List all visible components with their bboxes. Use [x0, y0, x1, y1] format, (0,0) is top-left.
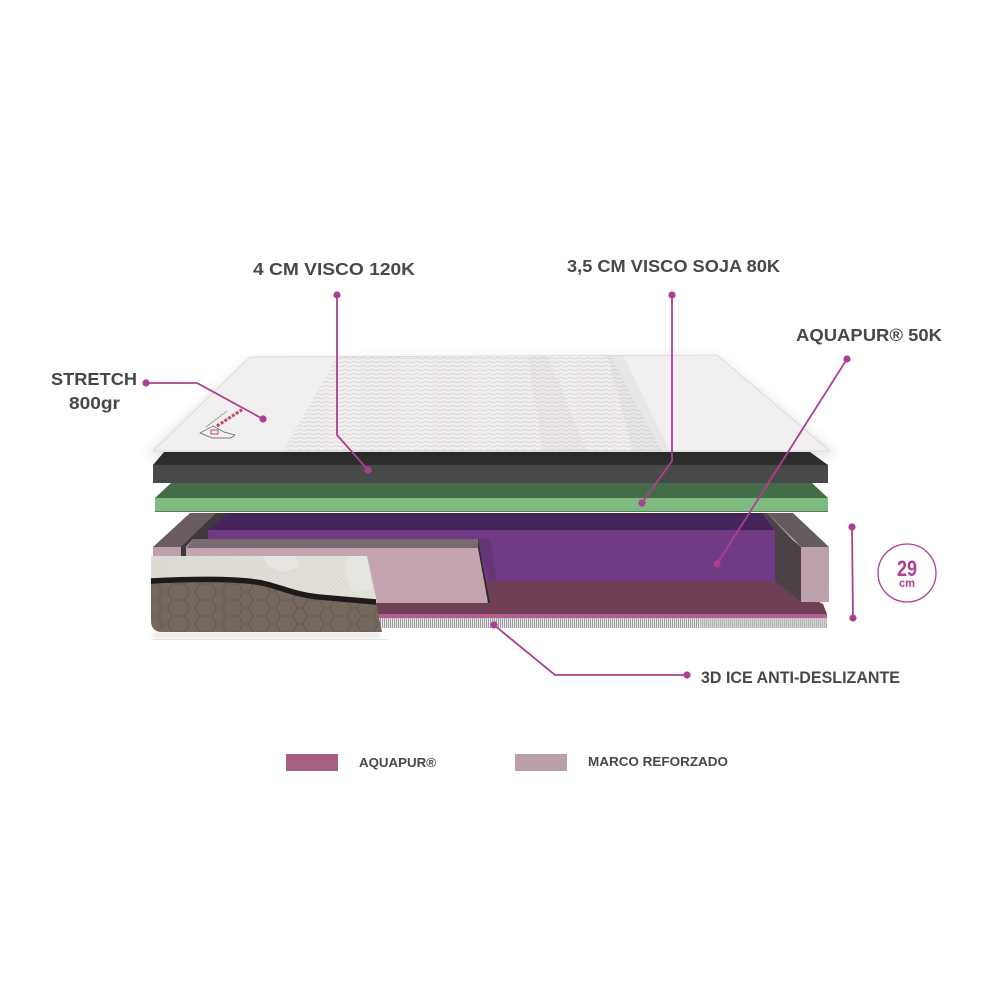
height dimension: 29 cm: cm: [899, 576, 915, 590]
legend item: marco reforzado: MARCO REFORZADO: [588, 754, 728, 769]
height dimension: 29 cm: [848, 523, 936, 622]
callout: stretch 800gr: 800gr: [69, 393, 120, 413]
height dimension: 29 cm: 29: [897, 556, 917, 581]
layer: green visco soja: [155, 483, 828, 512]
layer: reinforced frame left: [153, 513, 228, 559]
legend item: Aquapur: [286, 754, 436, 771]
mattress layers: [145, 355, 838, 628]
callout: 4 cm visco 120K: [253, 259, 415, 474]
callout: 3D ice anti-deslizante: 3D ICE ANTI-DESLIZANTE: [701, 669, 900, 687]
sample: black wave band: [151, 579, 376, 602]
layer: Aquapur floor: [375, 581, 827, 618]
layer: 3D ice anti-slip base: [380, 618, 827, 628]
legend item: marco reforzado: [515, 754, 728, 771]
callout: stretch 800gr: STRETCH: [51, 369, 137, 389]
layer: reinforced frame right: [763, 513, 829, 602]
legend item: Aquapur: AQUAPUR®: [359, 755, 436, 770]
callout: 3D ice anti-deslizante: [490, 621, 900, 687]
callout: 3,5 cm visco soja 80K: 3,5 CM VISCO SOJA 80K: [567, 256, 780, 276]
layer: dark visco: [153, 452, 828, 483]
layer: Aquapur purple core: [208, 513, 775, 581]
layer: reinforced frame front: [186, 539, 490, 603]
callout: Aquapur 50K: AQUAPUR® 50K: [796, 325, 942, 345]
callout: Aquapur 50K: [713, 325, 942, 568]
layer: stretch cover: [145, 355, 838, 456]
callout: stretch 800gr: [51, 369, 267, 423]
sample: cream quilted top: [151, 556, 377, 602]
callout: 4 cm visco 120K: 4 CM VISCO 120K: [253, 259, 415, 279]
cutaway sample: [150, 556, 387, 640]
legend: [286, 754, 728, 771]
callout: 3,5 cm visco soja 80K: [567, 256, 780, 507]
logo on cover: [200, 409, 243, 438]
sample: brown honeycomb bottom: [151, 582, 382, 632]
